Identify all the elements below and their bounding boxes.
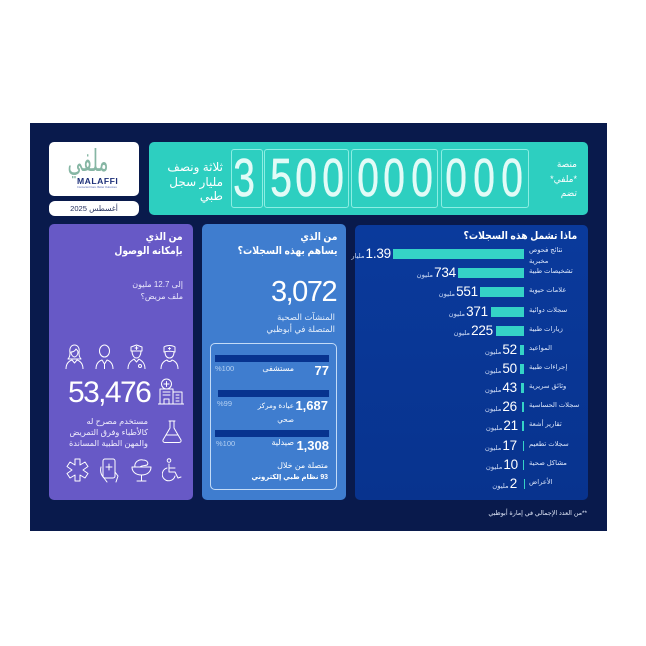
counter digits: 0 bbox=[411, 148, 433, 208]
clinic label: صحي bbox=[277, 415, 294, 424]
icon: phone with cross bbox=[100, 458, 118, 482]
row: lab results: مليار bbox=[351, 253, 365, 260]
headline counter panel bbox=[149, 142, 588, 215]
clinic percent: %99 bbox=[217, 399, 232, 408]
row: allergy records: مليون bbox=[485, 406, 501, 413]
counter digit frame 2 bbox=[264, 149, 349, 208]
counter digits: 0 bbox=[383, 148, 405, 208]
row: medication records: مليون bbox=[449, 311, 465, 318]
row: clinical documents: 43 bbox=[502, 380, 517, 395]
row: allergy records: 26 bbox=[502, 399, 517, 414]
panel: who can access bbox=[49, 224, 193, 500]
stat: licensed users: 53,476 bbox=[68, 376, 150, 409]
row: procedures: 50 bbox=[502, 361, 517, 376]
text: licensed users description: كالأطباء وفرق التمريض bbox=[70, 428, 148, 437]
row: symptoms bbox=[492, 476, 553, 491]
row: radiology reports: 21 bbox=[503, 418, 518, 433]
row: vital signs bbox=[439, 284, 566, 299]
bar chart rows bbox=[350, 246, 579, 491]
row: medication records bbox=[449, 304, 567, 319]
row: radiology reports: مليون bbox=[486, 425, 502, 432]
background panel bbox=[30, 123, 607, 531]
counter caption left: ثلاثة ونصف bbox=[167, 160, 223, 174]
row: medical visits bbox=[454, 323, 563, 338]
panel: who contributes bbox=[202, 224, 346, 500]
row: diagnoses: مليون bbox=[417, 272, 433, 279]
row: procedures: مليون bbox=[485, 368, 501, 375]
row: appointments bbox=[485, 342, 552, 357]
row: appointments: 52 bbox=[502, 342, 517, 357]
counter digits: 5 bbox=[270, 148, 292, 208]
row: medication records: 371 bbox=[466, 304, 488, 319]
text: licensed users description bbox=[69, 417, 148, 448]
logo tagline: Connected Care. Better Outcomes bbox=[77, 186, 117, 189]
row: vital signs: مليون bbox=[439, 291, 455, 298]
row: appointments: مليون bbox=[485, 349, 501, 356]
counter digit frame 4 bbox=[441, 149, 529, 208]
stat: connected facilities: 3,072 bbox=[271, 276, 336, 308]
row: allergy records: سجلات الحساسية bbox=[529, 402, 579, 409]
icon: male nurse bbox=[160, 345, 178, 369]
text: patient files: ملف مريض؟ bbox=[141, 292, 183, 300]
pharmacy bar bbox=[215, 430, 329, 437]
text: connected facilities description bbox=[266, 312, 335, 334]
row: lab results: نتائج فحوص bbox=[529, 247, 563, 254]
hospital count: 77 bbox=[315, 363, 329, 378]
row: symptoms: 2 bbox=[510, 476, 517, 491]
row: vaccination records: 17 bbox=[502, 438, 517, 453]
row: procedures bbox=[485, 361, 567, 376]
counter caption right bbox=[550, 159, 577, 198]
counter digit frame 3 bbox=[351, 149, 438, 208]
counter caption right: تضم bbox=[561, 188, 577, 198]
logo latin wordmark: MALAFFI bbox=[77, 176, 118, 186]
row: lab results: 1.39 bbox=[366, 246, 391, 261]
counter caption left: مليار سجل bbox=[169, 174, 223, 188]
row: medical visits: زيارات طبية bbox=[529, 326, 563, 333]
hospital bar bbox=[215, 355, 329, 362]
heading: who contributes bbox=[237, 231, 337, 256]
row: symptoms: الأعراض bbox=[529, 479, 553, 486]
heading: who can access: من الذي bbox=[146, 231, 183, 243]
counter digits: 3 bbox=[233, 148, 255, 208]
counter caption left: طبي bbox=[200, 189, 223, 203]
date pill: أغسطس 2025 bbox=[70, 204, 118, 213]
row: vital signs: 551 bbox=[456, 284, 478, 299]
counter digits bbox=[233, 148, 523, 208]
counter digit frame 1 bbox=[231, 149, 263, 208]
text: patient files bbox=[132, 280, 183, 302]
counter digits: 0 bbox=[445, 148, 467, 208]
row: health problems: مليون bbox=[486, 464, 502, 471]
panel: what records include bbox=[355, 225, 588, 500]
row: vaccination records bbox=[485, 438, 569, 453]
row: clinical documents: مليون bbox=[485, 387, 501, 394]
row: radiology reports: تقارير أشعة bbox=[529, 421, 562, 428]
text: licensed users description: والمهن الطبية المساندة bbox=[69, 439, 148, 448]
icon: man in suit bbox=[96, 344, 114, 369]
icon: medical star bbox=[66, 458, 88, 482]
row: lab results: مخبرية bbox=[529, 258, 548, 265]
date pill bbox=[49, 201, 139, 216]
text: connected facilities description: المنشآت الصحية bbox=[277, 312, 335, 322]
row: radiology reports bbox=[486, 418, 562, 433]
pharmacy percent: %100 bbox=[216, 439, 235, 448]
row: clinical documents bbox=[485, 380, 566, 395]
connected systems note bbox=[251, 461, 328, 481]
counter digits: 0 bbox=[501, 148, 523, 208]
clinic label bbox=[257, 401, 294, 424]
counter digits: 0 bbox=[322, 148, 344, 208]
row: lab results bbox=[350, 246, 563, 265]
icon: pharmacy bowl bbox=[132, 459, 152, 482]
counter caption right: *ملفي* bbox=[550, 174, 577, 184]
counter digits: 0 bbox=[357, 148, 379, 208]
clinic bar bbox=[218, 390, 329, 397]
row: clinical documents: وثائق سريرية bbox=[529, 383, 566, 390]
heading: who can access: بإمكانه الوصول bbox=[115, 244, 183, 256]
hospital percent: %100 bbox=[215, 364, 234, 373]
hospital label: مستشفى bbox=[262, 364, 294, 373]
row: medication records: سجلات دوائية bbox=[529, 307, 567, 314]
heading: what records include: ماذا تشمل هذه السجلات؟ bbox=[463, 230, 577, 242]
row: health problems: مشاكل صحية bbox=[529, 460, 567, 467]
connected systems note: متصلة من خلال bbox=[277, 461, 328, 470]
row: diagnoses: تشخيصات طبية bbox=[529, 268, 573, 275]
row: diagnoses: 734 bbox=[434, 265, 456, 280]
connected systems note: 93 نظام طبي إلكتروني bbox=[251, 474, 328, 480]
heading: who contributes: يساهم بهذه السجلات؟ bbox=[237, 244, 337, 256]
text: licensed users description: مستخدم مصرح له bbox=[86, 417, 148, 426]
counter digits: 0 bbox=[473, 148, 495, 208]
icon: woman bbox=[66, 344, 84, 369]
icon: hospital bbox=[158, 378, 184, 404]
row: symptoms: مليون bbox=[492, 483, 509, 490]
counter caption left bbox=[167, 160, 223, 203]
row: health problems: 10 bbox=[503, 457, 518, 472]
clinic count: 1,687 bbox=[295, 398, 328, 413]
facilities box bbox=[210, 343, 337, 490]
text: connected facilities description: المتصلة في أبوظبي bbox=[266, 324, 335, 334]
footnote: **من العدد الإجمالي في إمارة أبوظبي bbox=[488, 510, 587, 517]
clinic label: عيادة ومركز bbox=[258, 401, 294, 410]
row: vaccination records: مليون bbox=[485, 445, 501, 452]
row: medical visits: مليون bbox=[454, 330, 470, 337]
text: patient files: إلى 12.7 مليون bbox=[132, 280, 183, 289]
icon: female nurse bbox=[128, 344, 146, 369]
row: vaccination records: سجلات تطعيم bbox=[529, 441, 569, 448]
icon: flask bbox=[162, 420, 182, 443]
row: vital signs: علامات حيوية bbox=[529, 287, 566, 294]
logo arabic wordmark: ملفي bbox=[67, 145, 109, 178]
counter caption right: منصة bbox=[557, 159, 577, 169]
row: allergy records bbox=[485, 399, 579, 414]
pharmacy label: صيدلية bbox=[271, 438, 294, 447]
heading: who contributes: من الذي bbox=[300, 231, 337, 243]
row: medical visits: 225 bbox=[471, 323, 493, 338]
icon: wheelchair bbox=[162, 458, 182, 482]
pharmacy count: 1,308 bbox=[296, 438, 329, 453]
row: diagnoses bbox=[417, 265, 573, 280]
counter digits: 0 bbox=[295, 148, 317, 208]
row: appointments: المواعيد bbox=[529, 345, 552, 352]
row: procedures: إجراءات طبية bbox=[529, 364, 567, 371]
logo card bbox=[49, 142, 139, 196]
heading: who can access bbox=[115, 231, 183, 256]
row: health problems bbox=[486, 457, 567, 472]
